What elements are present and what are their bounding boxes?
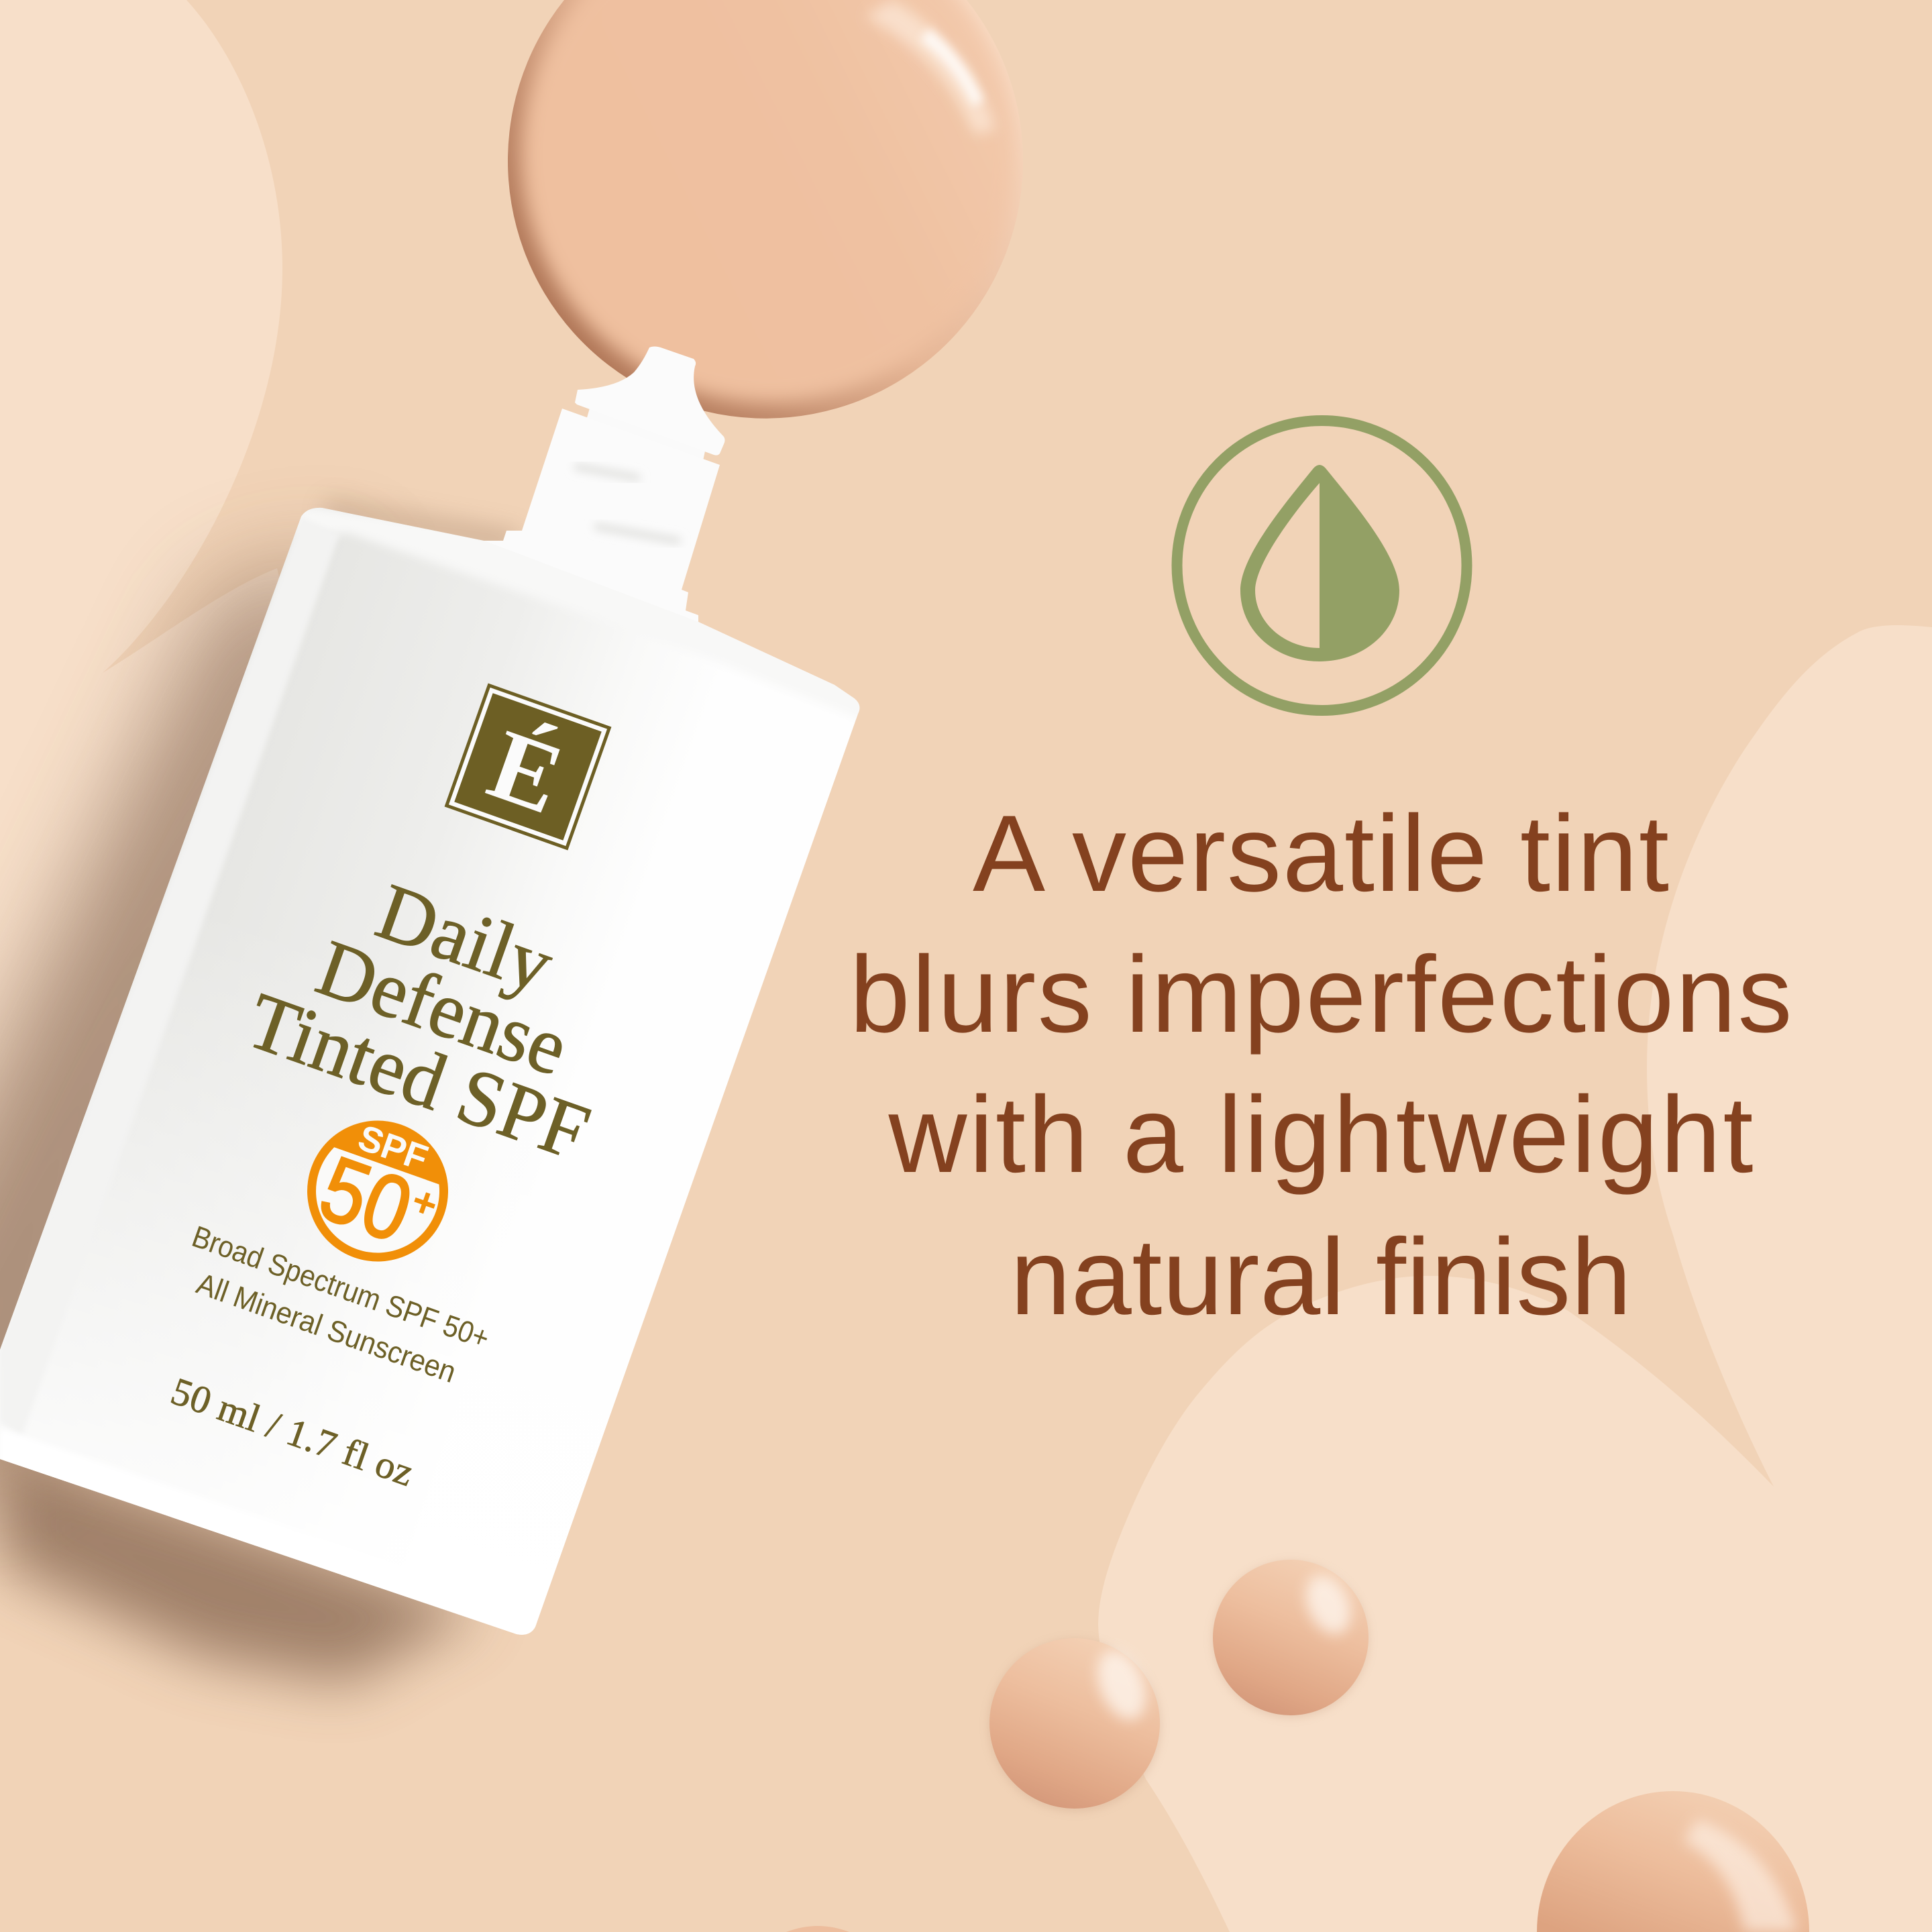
headline — [849, 793, 1792, 1338]
product droplet: upper-middle — [1213, 1560, 1368, 1717]
bottle neck — [484, 409, 720, 631]
product droplet: bottom-right — [1537, 1791, 1809, 1932]
SPF 50+ badge: + — [405, 1177, 444, 1229]
product droplet: lower-left — [989, 1638, 1161, 1811]
bottle — [0, 346, 872, 1644]
SPF 50+ badge — [288, 1101, 468, 1281]
headline: with a lightweight — [888, 1074, 1754, 1195]
product swatch: large round blob — [503, 0, 1033, 423]
headline: A versatile tint — [973, 793, 1669, 914]
SPF 50+ badge: SPF — [353, 1118, 433, 1179]
bottle nozzle — [575, 346, 724, 470]
net volume: 50 ml / 1.7 fl oz — [166, 1368, 419, 1495]
product name: Defense — [307, 922, 579, 1092]
SPF 50+ badge: 50 — [308, 1136, 425, 1262]
product descriptor: All Mineral Sunscreen — [193, 1266, 461, 1389]
headline: blurs imperfections — [849, 934, 1792, 1055]
blob highlight — [865, 0, 996, 134]
icon: half-filled water drop in circle — [1177, 421, 1466, 710]
background shape: upper-left light swoosh — [0, 0, 349, 1375]
bottle label — [118, 647, 716, 1511]
brand logo — [447, 686, 609, 848]
bottle body — [0, 496, 872, 1644]
product name: Daily — [366, 866, 564, 1010]
product descriptor: Broad Spectrum SPF 50+ — [188, 1219, 494, 1356]
headline: natural finish — [1010, 1216, 1631, 1338]
top rim — [295, 503, 865, 721]
product name: Tinted SPF — [237, 975, 600, 1177]
brand logo: É — [476, 708, 576, 835]
bottom white rim — [0, 1429, 543, 1640]
left edge strip — [0, 517, 339, 1436]
product droplet: bottom edge sliver — [786, 1926, 849, 1932]
product name — [237, 837, 649, 1177]
bottle drop shadow — [0, 500, 523, 1684]
background shape: right light swoosh — [1098, 625, 1932, 1932]
